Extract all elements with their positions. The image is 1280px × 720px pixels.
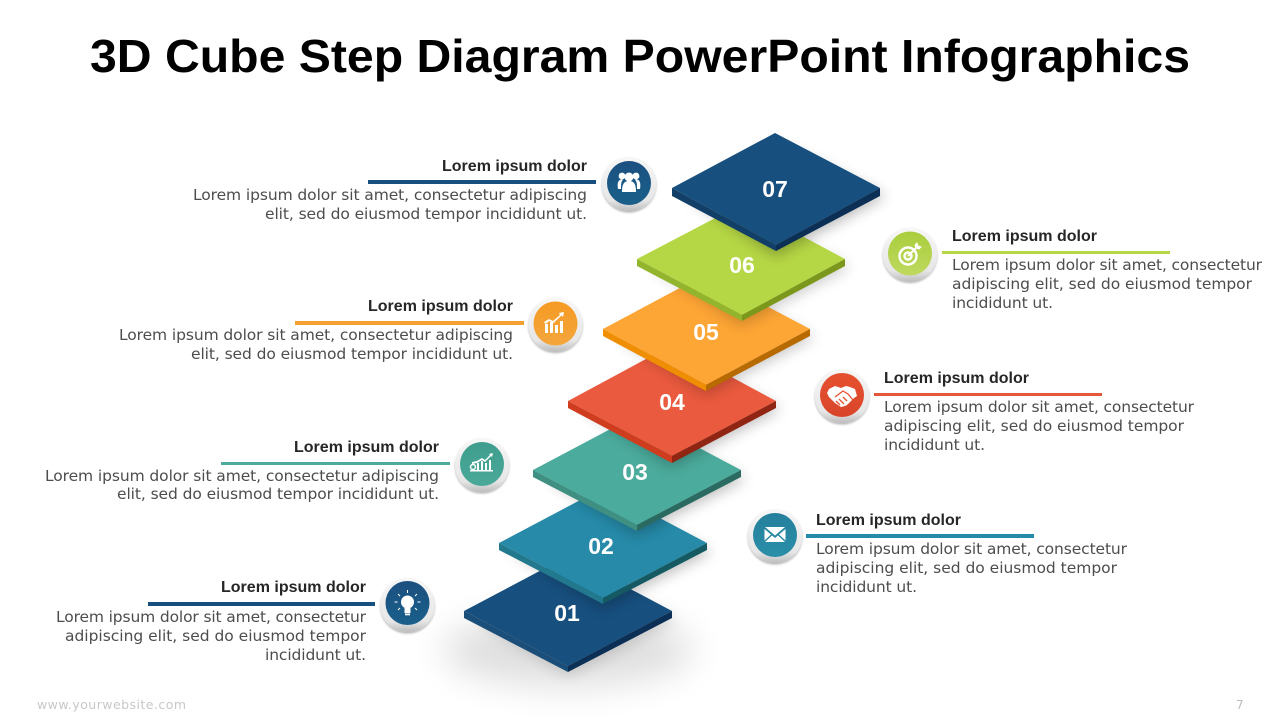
body text	[952, 256, 1263, 312]
heading: Lorem ipsum dolor	[368, 298, 513, 315]
callout: top left, step 07	[193, 157, 656, 223]
body text: Lorem ipsum dolor sit amet, consectetur adipiscing	[119, 326, 513, 344]
icon: target	[883, 228, 937, 282]
rule	[295, 321, 524, 325]
body text	[884, 398, 1195, 454]
step 02 plate	[499, 488, 712, 608]
body text: elit, sed do eiusmod tempor incididunt ut.	[265, 205, 587, 223]
heading: Lorem ipsum dolor	[221, 579, 366, 596]
body text	[119, 326, 513, 363]
body text: elit, sed do eiusmod tempor incididunt ut.	[191, 345, 513, 363]
body text: Lorem ipsum dolor sit amet, consectetur adipiscing	[193, 186, 587, 204]
icon: light bulb	[380, 578, 434, 632]
rule	[221, 462, 450, 465]
icon: line chart	[455, 438, 509, 492]
body text: adipiscing elit, sed do eiusmod tempor	[884, 417, 1185, 435]
callout: right, step 02	[748, 509, 1128, 596]
rule	[942, 251, 1170, 254]
icon: growth bars	[528, 298, 582, 352]
callout: right, step 06	[883, 228, 1263, 312]
body text: Lorem ipsum dolor sit amet, consectetur adipiscing	[45, 467, 439, 485]
body text: Lorem ipsum dolor sit amet, consectetur	[56, 608, 367, 626]
body text: Lorem ipsum dolor sit amet, consectetur	[952, 256, 1263, 274]
body text	[45, 467, 439, 503]
heading: Lorem ipsum dolor	[816, 512, 961, 529]
rule	[368, 180, 596, 184]
heading: Lorem ipsum dolor	[442, 158, 587, 175]
step 06 plate: 06	[729, 252, 755, 278]
step 06 plate	[637, 204, 850, 325]
body text: Lorem ipsum dolor sit amet, consectetur	[884, 398, 1195, 416]
rule	[148, 602, 375, 606]
footer website: www.yourwebsite.com	[37, 697, 186, 712]
icon: handshake	[815, 369, 869, 423]
step 05 plate: 05	[693, 319, 719, 345]
body text	[816, 540, 1128, 596]
body text: elit, sed do eiusmod tempor incididunt ut.	[117, 485, 439, 503]
step 04 plate	[568, 345, 781, 467]
step 01 plate	[464, 556, 676, 676]
ground shadow	[443, 614, 693, 686]
icon: people	[602, 157, 656, 211]
step 03 plate: 03	[622, 459, 648, 485]
body text: Lorem ipsum dolor sit amet, consectetur	[816, 540, 1128, 558]
step 07 plate: 07	[762, 176, 788, 202]
step diagram	[464, 133, 886, 676]
body text: incididunt ut.	[816, 578, 917, 596]
step 01 plate: 01	[554, 600, 580, 626]
callout: left, step 01	[56, 578, 434, 664]
body text: adipiscing elit, sed do eiusmod tempor	[952, 275, 1253, 293]
step 02 plate: 02	[588, 533, 614, 559]
callout: right, step 04	[815, 369, 1195, 454]
callout: left, step 05	[119, 298, 582, 363]
body text: incididunt ut.	[884, 436, 985, 454]
rule	[806, 534, 1034, 538]
page number: 7	[1236, 698, 1244, 712]
body text	[56, 608, 367, 664]
body text: incididunt ut.	[265, 646, 366, 664]
callout: left, step 03	[45, 438, 509, 503]
body text	[193, 186, 587, 223]
heading: Lorem ipsum dolor	[952, 228, 1097, 245]
heading: Lorem ipsum dolor	[884, 370, 1029, 387]
step 07 plate	[672, 133, 886, 256]
rule	[874, 393, 1102, 396]
step 03 plate	[533, 415, 746, 535]
icon: envelope	[748, 509, 802, 563]
body text: adipiscing elit, sed do eiusmod tempor	[65, 627, 367, 645]
step 05 plate	[603, 274, 815, 395]
step 04 plate: 04	[659, 389, 685, 415]
title: 3D Cube Step Diagram PowerPoint Infographics	[90, 30, 1190, 82]
body text: adipiscing elit, sed do eiusmod tempor	[816, 559, 1118, 577]
heading: Lorem ipsum dolor	[294, 439, 439, 456]
body text: incididunt ut.	[952, 294, 1053, 312]
